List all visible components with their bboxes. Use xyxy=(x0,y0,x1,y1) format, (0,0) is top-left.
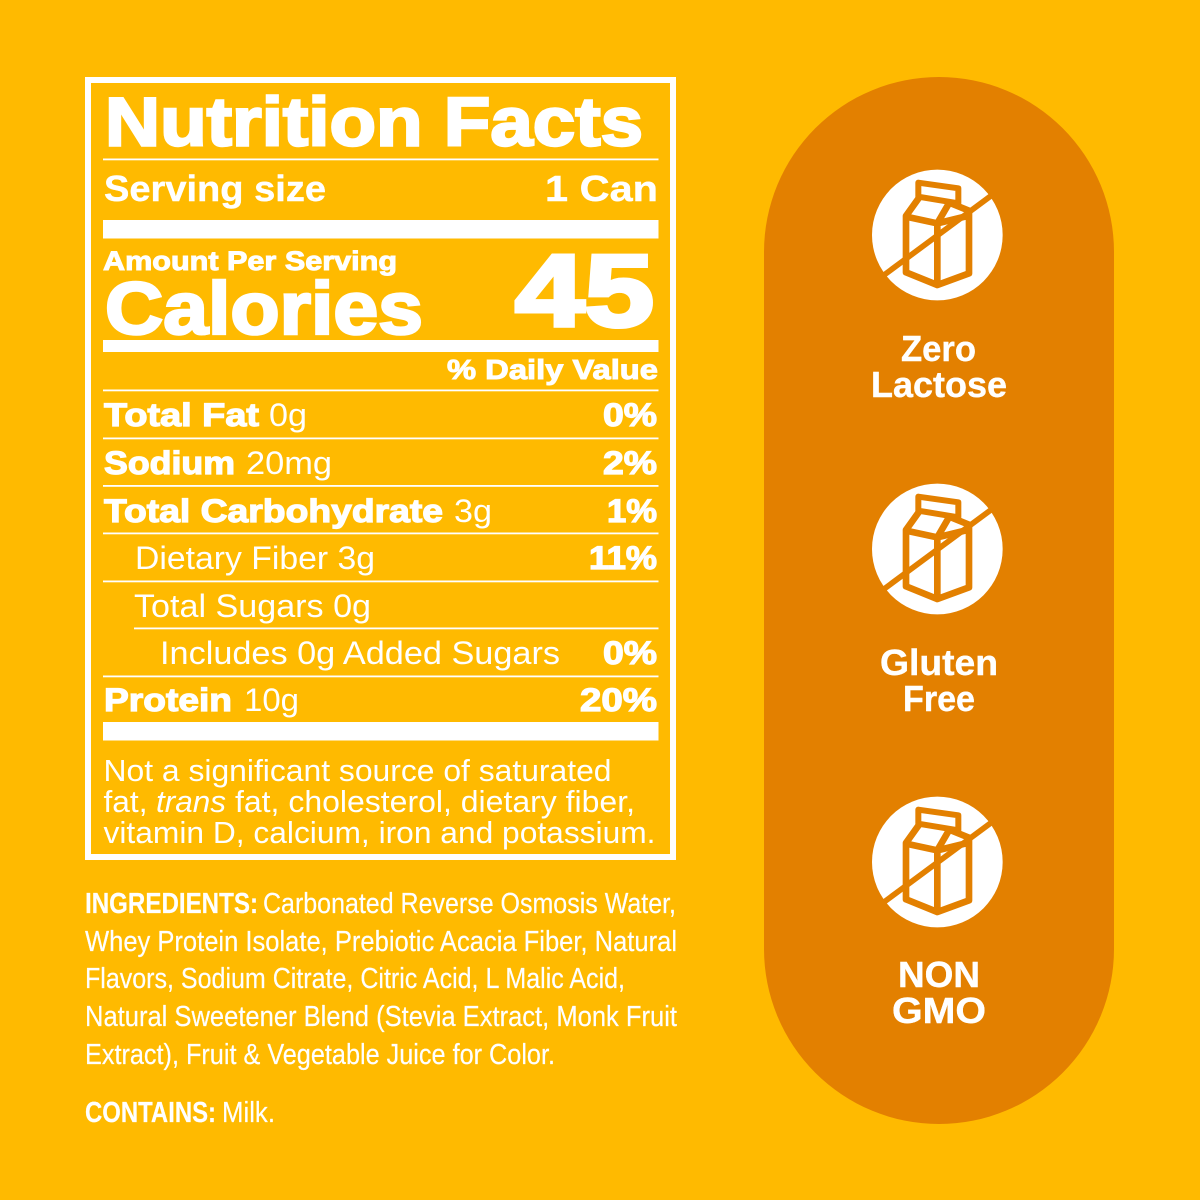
row: total fat: Total Fat xyxy=(104,397,259,433)
row: protein xyxy=(104,682,657,718)
row: total carbohydrate: 3g xyxy=(454,493,492,529)
amount per serving: Amount Per Serving xyxy=(103,246,397,276)
row: added sugars: 0% xyxy=(603,635,657,671)
row: protein: 20% xyxy=(580,682,657,718)
row: total carbohydrate xyxy=(104,493,657,529)
icon: no lactose milk carton xyxy=(872,170,1003,300)
row: sodium: 2% xyxy=(603,445,657,481)
row: sodium: 20mg xyxy=(246,445,332,481)
calories value: 45 xyxy=(515,234,654,348)
row: sodium: Sodium xyxy=(104,445,235,481)
heading: Nutrition Facts: Nutrition Facts xyxy=(105,84,643,160)
daily value heading: % Daily Value xyxy=(447,354,658,385)
footnote: vitamin D, calcium, iron and potassium. xyxy=(104,815,656,850)
row: dietary fiber: Dietary Fiber 3g xyxy=(135,540,375,576)
row: protein: Protein xyxy=(104,682,232,718)
serving size row: 1 Can xyxy=(545,168,658,209)
label: zero lactose xyxy=(871,328,1007,405)
calories label: Calories xyxy=(105,267,423,350)
row: total sugars: Total Sugars 0g xyxy=(134,588,371,624)
ingredients text xyxy=(85,888,677,1071)
row: total carbohydrate: Total Carbohydrate xyxy=(104,493,443,529)
serving size row: Serving size xyxy=(104,168,326,209)
row: protein: 10g xyxy=(244,682,299,718)
ingredients text: Extract), Fruit & Vegetable Juice for Color. xyxy=(85,1039,555,1071)
row: sodium xyxy=(104,445,657,481)
label: zero lactose: Lactose xyxy=(871,364,1007,405)
label: gluten free: Gluten xyxy=(880,642,998,683)
icon: non gmo milk carton xyxy=(872,797,1003,927)
footnote: trans xyxy=(156,784,226,819)
label: non gmo: NON xyxy=(898,954,980,995)
row: total fat: 0% xyxy=(603,397,657,433)
footnote: Not a significant source of saturated xyxy=(104,753,612,788)
ingredients text: Flavors, Sodium Citrate, Citric Acid, L Malic Acid, xyxy=(85,963,625,995)
ingredients text: Whey Protein Isolate, Prebiotic Acacia Fiber, Natural xyxy=(85,926,677,958)
contains text: CONTAINS: xyxy=(85,1097,216,1129)
row: added sugars: Includes 0g Added Sugars xyxy=(160,635,560,671)
ingredients text: Carbonated Reverse Osmosis Water, xyxy=(263,888,676,920)
panel: nutrition facts label xyxy=(88,80,673,857)
contains text: Milk. xyxy=(222,1097,275,1129)
panel: dietary claims pill xyxy=(764,77,1114,1124)
label: non gmo: GMO xyxy=(892,990,986,1031)
footnote: fat, cholesterol, dietary fiber, xyxy=(235,784,635,819)
label: gluten free xyxy=(880,642,998,719)
label: non gmo xyxy=(892,954,986,1031)
row: total fat xyxy=(104,397,657,433)
ingredients text: INGREDIENTS: xyxy=(85,888,258,920)
row: total carbohydrate: 1% xyxy=(607,493,657,529)
ingredients text: Natural Sweetener Blend (Stevia Extract, Monk Fruit xyxy=(85,1001,677,1033)
footnote xyxy=(104,753,656,850)
label border xyxy=(88,80,673,857)
row: dietary fiber xyxy=(135,540,657,576)
icon: gluten free milk carton xyxy=(872,484,1003,614)
row: dietary fiber: 11% xyxy=(589,540,657,576)
row: total fat: 0g xyxy=(269,397,307,433)
footnote: fat, xyxy=(104,784,148,819)
label: zero lactose: Zero xyxy=(901,328,976,369)
label: gluten free: Free xyxy=(903,678,975,719)
serving size row xyxy=(104,168,658,209)
